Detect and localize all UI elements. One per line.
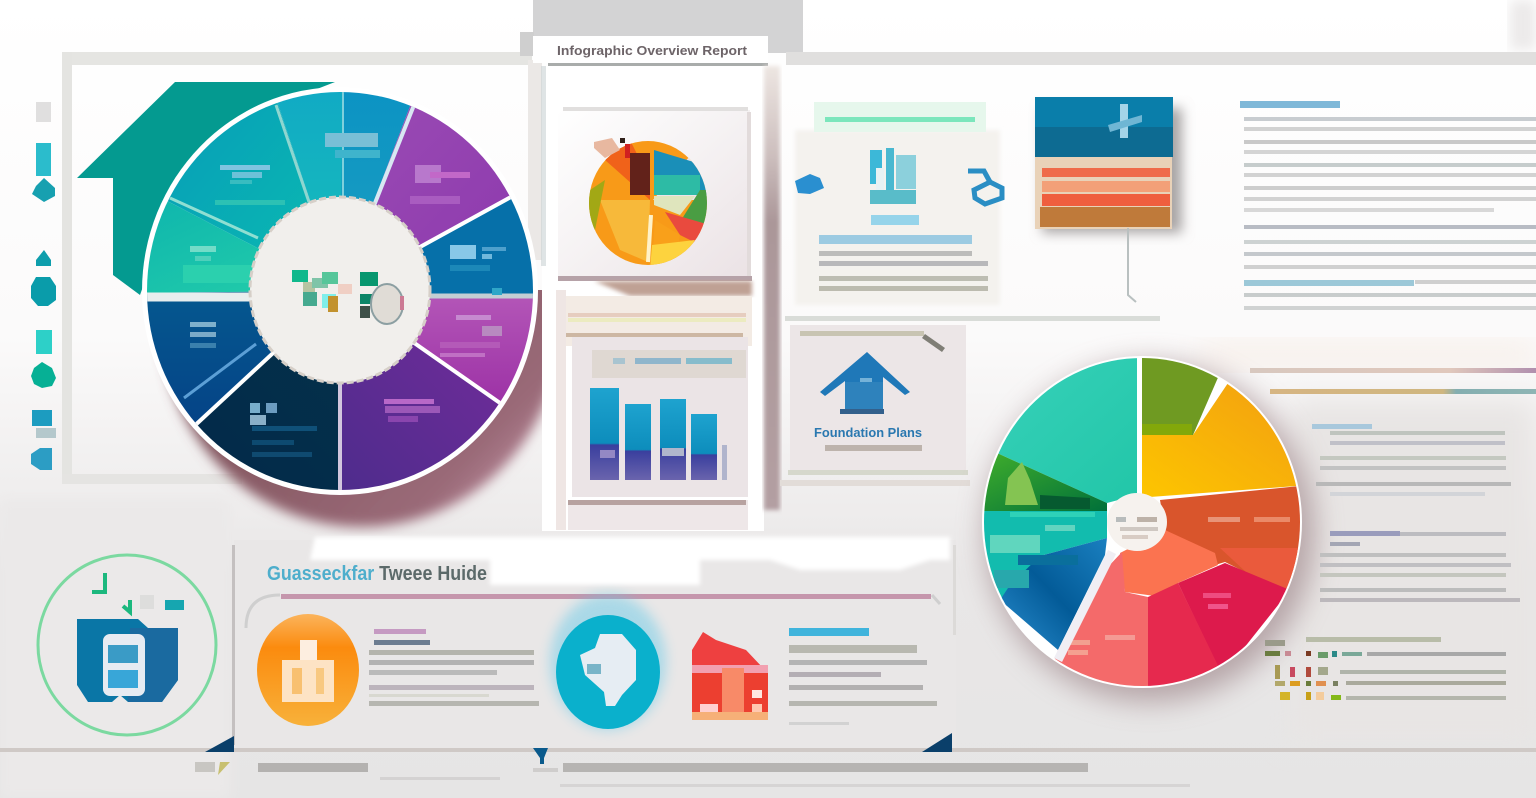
rounded rule around bottom icons — [246, 594, 940, 628]
title bar: Infographic Overview Report — [557, 43, 748, 58]
segment: upper left teal — [168, 102, 310, 249]
house caption — [814, 426, 922, 451]
icon: data chart — [870, 148, 916, 204]
chart: bar chart — [590, 388, 727, 480]
segment: right blue — [422, 197, 533, 296]
corner marker right — [922, 733, 952, 752]
slice: teal — [998, 358, 1137, 503]
chart: mini pie — [589, 138, 707, 265]
title bar — [520, 32, 768, 66]
pin marker — [533, 748, 548, 764]
text: orange item — [369, 629, 539, 706]
panel: centre column — [541, 66, 780, 531]
icon: orange circle — [257, 614, 359, 726]
panel: bottom section — [232, 537, 956, 748]
chart: large pie — [970, 350, 1315, 702]
panel: house card — [780, 325, 970, 486]
icon: layered card — [1035, 97, 1182, 233]
footer text — [195, 762, 1190, 787]
slice: teal stripes — [984, 511, 1107, 600]
icon: blue circle — [550, 594, 666, 730]
slice: crimson — [1178, 563, 1290, 672]
icon: sidebar 4 — [36, 250, 51, 266]
slice: salmon — [1054, 552, 1148, 686]
icon: sidebar 6 — [36, 330, 52, 354]
label pill — [814, 102, 986, 132]
segment: bottom navy — [197, 354, 340, 490]
icon: hub map symbol — [292, 270, 404, 324]
segment: top teal — [278, 92, 343, 201]
heading: bottom section: Guasseckfar Tweee Huide — [267, 563, 487, 585]
connector line — [1128, 228, 1136, 302]
divider row — [785, 316, 1160, 321]
icon: sidebar 8 — [32, 410, 52, 426]
segment: upper right purple — [376, 106, 510, 246]
icon: blue house — [820, 352, 910, 414]
wheel hub — [250, 197, 430, 383]
icon: right cycle — [968, 171, 1002, 204]
house caption: Foundation Plans — [814, 426, 922, 440]
icon: sidebar 2 — [36, 143, 51, 176]
slice: red — [1148, 583, 1218, 686]
icon: left droplet — [795, 174, 824, 194]
icon: sidebar 7 — [31, 362, 56, 388]
slice: green — [984, 454, 1107, 511]
panel: process card — [795, 102, 1002, 305]
corner marker left — [205, 736, 234, 752]
top grey tab — [533, 0, 803, 53]
left sidebar icons — [31, 102, 56, 470]
text block — [819, 235, 988, 291]
slice: olive — [1142, 358, 1218, 435]
segment: right purple — [416, 296, 533, 403]
pie hub — [1107, 493, 1167, 551]
dividers: right of pie — [1250, 368, 1536, 394]
legend — [1265, 637, 1506, 700]
footer rule — [0, 733, 1536, 764]
chart: segmented wheel — [142, 88, 538, 495]
slice: orange red — [1160, 485, 1310, 592]
icon: sidebar 9 — [31, 448, 52, 470]
segment: top blue — [341, 92, 410, 202]
panel: right text — [1240, 101, 1536, 310]
slice: coral — [1120, 530, 1218, 598]
icon: red house — [692, 632, 768, 720]
text: bar chart heading — [613, 358, 732, 364]
slice: blue — [1000, 538, 1107, 650]
panel: right lower text — [1312, 424, 1520, 602]
icon: sidebar 3 — [32, 178, 55, 202]
icon: sidebar 5 — [31, 277, 56, 306]
segment labels — [183, 133, 506, 457]
icon: teal house arrow behind wheel — [77, 82, 335, 295]
slice: yellow — [1142, 383, 1310, 497]
icon: sidebar 1 — [36, 102, 51, 122]
text: red item — [789, 628, 937, 725]
segment: left teal — [147, 201, 260, 292]
frame band across the top — [62, 52, 1536, 484]
icon: green ring with shield — [38, 555, 216, 735]
panel: left wheel shadow — [158, 290, 542, 535]
segment: bottom purple — [341, 344, 500, 490]
segment: lower left blue — [147, 292, 272, 424]
